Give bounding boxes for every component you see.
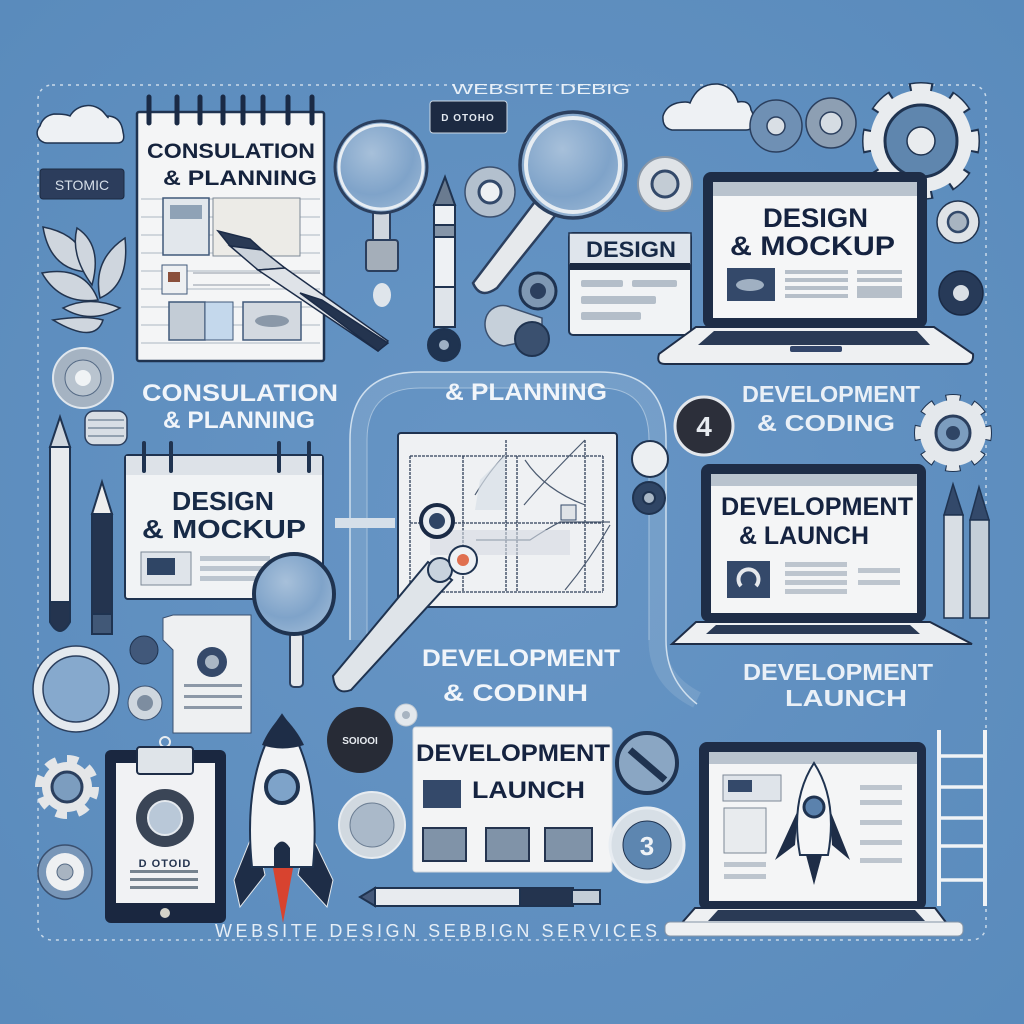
icon: coin	[339, 792, 405, 858]
icon: tall pencil	[428, 177, 460, 361]
icon: magnifier lower left	[254, 554, 334, 687]
heading: development & coding: DEVELOPMENT	[742, 381, 920, 407]
number badge 4: 4	[696, 411, 712, 442]
heading: consultation & planning mid-left	[142, 380, 338, 434]
icon: dials top right	[750, 98, 856, 152]
heading: development launch right: LAUNCH	[785, 685, 907, 711]
title: website design top: WEBSITE DEBIG	[452, 81, 630, 98]
icon: gauges centre bottom	[610, 733, 684, 882]
number badge 4	[675, 397, 733, 455]
label: dark round badge	[327, 704, 417, 773]
heading: development launch right	[743, 659, 933, 711]
label: dark tag top: D OTOHO	[441, 113, 495, 124]
heading: development & codinh	[422, 645, 620, 707]
heading: design & mockup: & MOCKUP	[730, 231, 895, 261]
icon: pen on notepad	[218, 231, 388, 351]
icon: ladder	[939, 730, 985, 906]
rings	[149, 97, 312, 123]
heading: development launch	[721, 493, 913, 550]
icon: clipboard tablet	[105, 737, 226, 923]
heading: development & codinh: & CODINH	[443, 680, 588, 707]
icon: clipboard tablet: D OTOID	[139, 858, 191, 870]
panel: development launch card	[413, 727, 612, 872]
icon: document	[163, 615, 251, 733]
heading: development launch right: DEVELOPMENT	[743, 659, 933, 685]
heading: card text: DEVELOPMENT	[416, 740, 610, 767]
panel: laptop rocket	[665, 742, 963, 936]
icon: magnifier left	[335, 121, 427, 271]
icon: gear right	[920, 400, 986, 466]
heading: design notepad: & MOCKUP	[142, 514, 306, 544]
panel: laptop design & mockup	[658, 172, 973, 364]
heading: consultation & planning: CONSULATION	[147, 140, 315, 163]
icon: rocket on screen	[775, 763, 850, 885]
icon: big magnifier	[473, 112, 626, 293]
heading: development & coding	[742, 381, 920, 436]
icon: cloud top right	[663, 84, 753, 130]
heading: & planning center: & PLANNING	[445, 379, 607, 406]
footer title: WEBSITE DESIGN SEBBIGN SERVICES	[215, 921, 657, 941]
icon: wrench	[333, 505, 477, 691]
icon: pencils left	[50, 417, 112, 634]
icon: large gear	[870, 90, 972, 192]
icon: small badge	[465, 167, 515, 217]
icon: rocket	[234, 715, 333, 923]
heading: card text: LAUNCH	[472, 777, 585, 804]
icon: badge left	[53, 348, 127, 445]
heading: consultation & planning	[147, 140, 317, 190]
heading: design notepad: DESIGN	[172, 486, 274, 516]
heading: development & coding: & CODING	[757, 410, 895, 436]
icon: pens right	[944, 484, 989, 618]
label: stomic tag: STOMIC	[55, 177, 109, 193]
heading: consultation & planning mid-left: CONSULATION	[142, 380, 338, 407]
icon: dark dial right	[939, 271, 983, 315]
heading: consultation & planning mid-left: & PLANNING	[163, 407, 315, 434]
label: dark tag top	[430, 101, 507, 133]
icon: gauges centre bottom: 3	[640, 831, 654, 861]
heading: card text	[416, 740, 610, 804]
heading: development launch: & LAUNCH	[739, 522, 869, 550]
heading: development launch: DEVELOPMENT	[721, 493, 913, 521]
heading: design & mockup: DESIGN	[763, 203, 868, 233]
icon: rosette near laptop	[638, 157, 692, 211]
icon: rosette right	[937, 201, 979, 243]
panel: design & mockup notepad	[125, 443, 323, 599]
heading: design & mockup	[730, 203, 895, 261]
icon: center right buttons	[632, 441, 668, 514]
panel: laptop development & launch	[672, 464, 972, 644]
icon: leaf plant	[42, 227, 126, 332]
heading: design notepad	[142, 486, 306, 544]
heading: consultation & planning: & PLANNING	[163, 167, 317, 190]
panel: consultation notepad	[137, 97, 324, 361]
panel: flow loop and wireframe	[335, 372, 697, 704]
icon: long pen	[360, 888, 600, 906]
icon: rosette lower left	[38, 845, 92, 899]
heading: development & codinh: DEVELOPMENT	[422, 645, 620, 672]
icon: cloud top left	[37, 106, 124, 143]
label: stomic tag	[40, 169, 124, 199]
icon: gear lower left	[42, 762, 92, 812]
panel: design card	[569, 233, 691, 335]
icon: circle lens left	[33, 636, 162, 732]
label: dark round badge: SOIOOI	[342, 736, 378, 747]
panel: design card: DESIGN	[586, 237, 676, 262]
icon: blobs under magnifier	[373, 273, 556, 356]
